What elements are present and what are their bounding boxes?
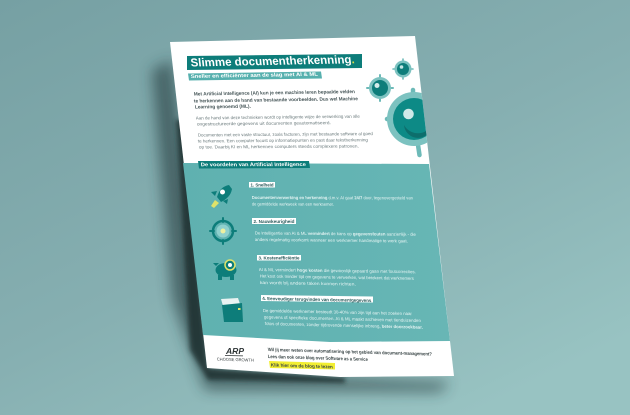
label: 2. Nauwkeurigheid — [254, 219, 295, 224]
flyer content — [170, 36, 454, 377]
text: anders regelmatig voorkomt wanneer een werknemer handmatige te werk gaat. — [255, 237, 408, 243]
body text: Aan de hand van deze technieken wordt op intelligente wijze de verwerking van alle — [196, 114, 361, 120]
item 3: cost efficiency — [213, 255, 416, 287]
subtitle: Sneller en efficiënter aan de slag met AI & ML — [191, 72, 319, 80]
intro text: Met Artificial Intelligence (AI) kun je een machine leren bepaalde velden — [194, 89, 355, 97]
icon: virus cluster — [366, 58, 428, 158]
text: Documentenverwerking en herkenning d.m.v. AI gaat 24/7 door, tegenovergesteld van — [252, 195, 414, 200]
body text: Documenten met een vaste structuur, zoals facturen, zijn met bestaande software al goed — [198, 131, 374, 137]
logo: ARP — [225, 347, 245, 356]
link highlight: Klik hier om de blog te lezen — [271, 363, 333, 369]
text: de gemiddelde werkweek van een werknemer. — [252, 202, 334, 207]
text: De gemiddelde werknemer besteedt 30-40% van zijn tijd aan het zoeken naar — [263, 308, 413, 316]
logo: CHOOSE GROWTH — [217, 357, 254, 363]
call to action — [268, 347, 432, 370]
text — [259, 267, 416, 287]
teal benefits panel — [183, 163, 450, 342]
icon: folder — [221, 298, 243, 322]
text: Het kost ook minder tijd om gegevens te verwerken, wat betekent dat werknemers — [260, 274, 415, 281]
paper shadow — [152, 60, 450, 392]
call to action: Lees dan ook onze blog over Software as a Service — [268, 354, 368, 362]
label: 4. Eenvoudiger terugvinden van documentgegevens — [262, 296, 372, 303]
label: 3. Kostenefficiëntie — [258, 256, 300, 260]
logo — [217, 347, 254, 363]
heading: benefits: De voordelen van Artificial Intelligence — [201, 162, 306, 168]
label: 1. Snelheid — [250, 182, 274, 188]
icon: piggy bank — [213, 260, 236, 280]
item 1: speed — [211, 182, 414, 208]
icon: large virus — [384, 88, 428, 158]
body text — [196, 114, 374, 149]
icon: target — [210, 218, 236, 244]
body text: op toe. Daarbij KI en ML herkennen computers steeds complexere patronen. — [199, 144, 359, 149]
icon: rocket — [211, 185, 232, 208]
flyer sheet — [170, 36, 454, 377]
body text: te herkennen. Een computer focust op informatiepunten en past daar tekstherkenning — [198, 137, 369, 143]
icon: medium virus — [367, 75, 393, 101]
text: gegevens of specifieke documenten. AI & ML maakt archieven met tienduizenden — [264, 315, 422, 323]
intro text: te herkennen aan de hand van bestaande voorbeelden. Dus wel Machine — [194, 96, 359, 104]
call to action: Wil jij meer weten over automatisering op het gebied van document-management? — [268, 347, 432, 357]
body text: ongestructureerde gegevens uit documenten geautomatiseerd. — [197, 120, 331, 126]
item 2: accuracy — [210, 218, 417, 244]
text: kan wordt bij andere taken kunnen richten. — [260, 280, 356, 287]
title: Slimme documentherkenning. — [190, 54, 355, 69]
item 4: retrieval — [221, 295, 423, 330]
text — [252, 195, 414, 207]
text — [263, 308, 423, 330]
intro text: Learning genoemd (ML). — [195, 104, 251, 110]
text — [255, 231, 417, 243]
intro text — [194, 89, 359, 110]
text: De intelligentie van AI & ML vermindert de kans op gegevensfouten aanzienlijk - die — [255, 231, 417, 237]
icon: small virus — [393, 59, 413, 79]
text: fotos of documenten, zonder tijdrovende menselijke inbreng, beter doorzoekbaar. — [265, 321, 423, 330]
text: AI & ML vermindert hoge kosten die gewoonlijk gepaard gaan met foutcorrecties. — [259, 267, 416, 274]
